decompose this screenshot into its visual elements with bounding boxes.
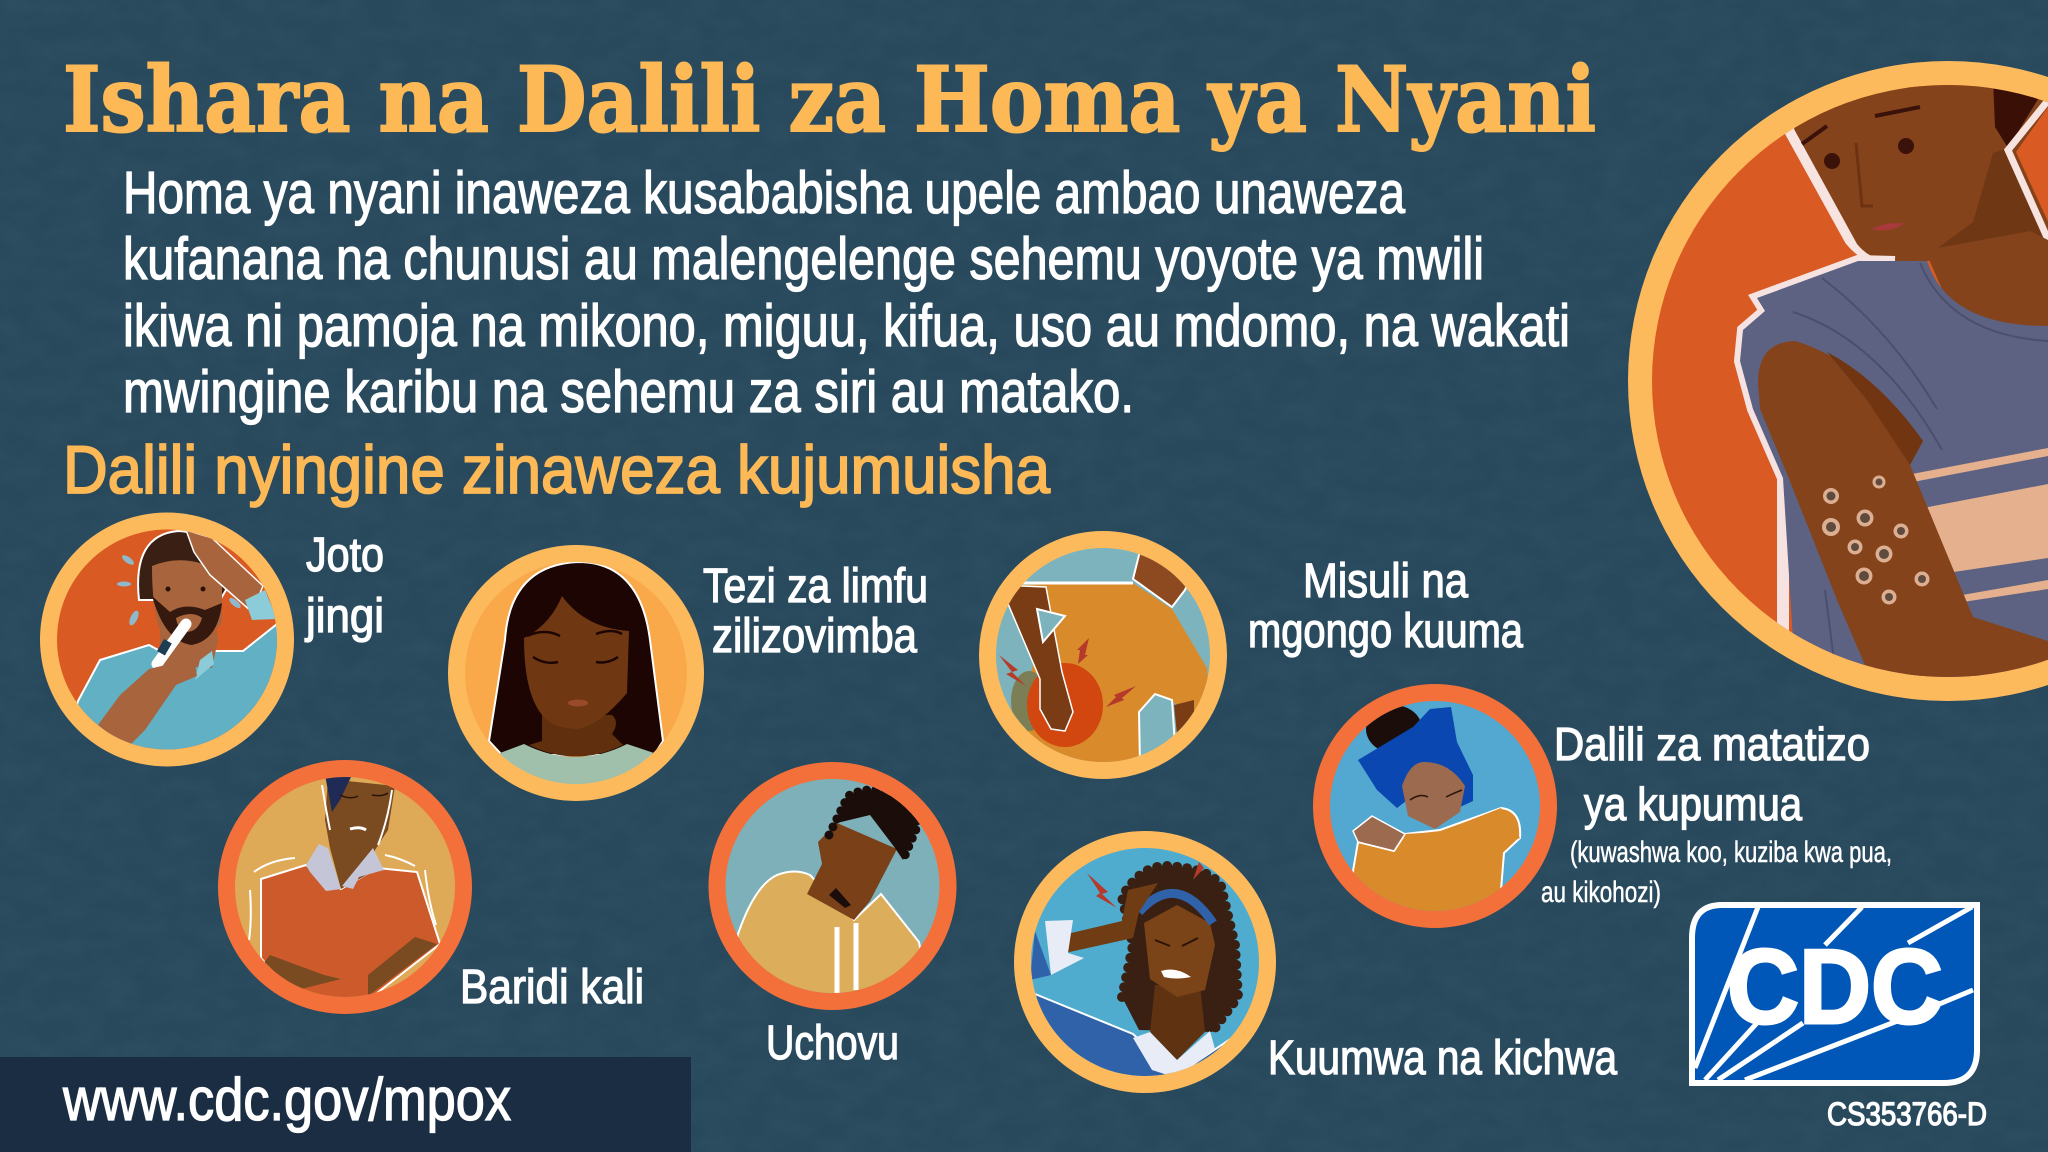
icon: headache [1014,831,1276,1093]
label: respiratory symptoms [1541,718,1892,909]
label: muscle and back aches: Misuli na [1303,555,1468,608]
label: muscle and back aches [1248,555,1523,658]
icon: swollen lymph nodes [448,545,704,801]
label: swollen lymph nodes [703,560,928,663]
label: respiratory symptoms: ya kupumua [1584,778,1802,830]
subheading: Dalili nyingine zinaweza kujumuisha [63,432,1050,508]
label: respiratory symptoms: Dalili za matatizo [1554,718,1870,770]
intro paragraph: kufanana na chunusi au malengelenge sehemu yoyote ya mwili [123,226,1484,292]
icon: fever [40,512,294,770]
intro paragraph: mwingine karibu na sehemu za siri au matako. [123,359,1134,425]
label: fever: jingi [304,590,384,643]
illustration: person with rash on arm [1628,60,2048,701]
label: swollen lymph nodes: Tezi za limfu [703,560,928,613]
label: respiratory symptoms: au kikohozi) [1541,876,1661,909]
logo: CDC: CDC [1727,928,1943,1046]
label: fever [304,529,384,643]
intro paragraph: Homa ya nyani inaweza kusababisha upele ambao unaweza [123,160,1405,226]
intro paragraph [123,160,1570,425]
label: headache: Kuumwa na kichwa [1268,1032,1617,1085]
label: respiratory symptoms: (kuwashwa koo, kuziba kwa pua, [1570,836,1892,869]
website bar [0,1057,691,1152]
label: muscle and back aches: mgongo kuuma [1248,605,1523,658]
website bar: www.cdc.gov/mpox [62,1066,511,1133]
label: chills: Baridi kali [460,961,644,1014]
logo: CDC [1692,905,1977,1083]
label: fever: Joto [306,529,384,582]
icon: muscle and back aches [979,530,1227,779]
icon: chills [218,760,472,1014]
label: exhaustion: Uchovu [766,1017,899,1070]
publication code: CS353766-D [1827,1096,1987,1132]
label: swollen lymph nodes: zilizovimba [712,610,917,663]
title: Ishara na Dalili za Homa ya Nyani [63,47,1596,153]
icon: exhaustion [708,762,956,1010]
intro paragraph: ikiwa ni pamoja na mikono, miguu, kifua, uso au mdomo, na wakati [123,293,1570,359]
icon: respiratory symptoms [1313,684,1557,928]
